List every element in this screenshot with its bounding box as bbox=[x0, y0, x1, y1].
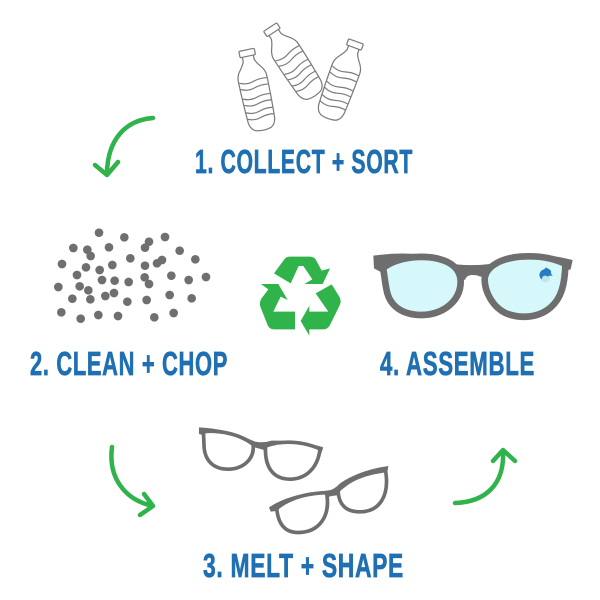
heading: step 3: 3. MELT + SHAPE bbox=[203, 547, 404, 584]
lower frame bbox=[269, 466, 388, 531]
lens logo bbox=[539, 267, 553, 282]
left lens bbox=[387, 260, 457, 312]
heading: step 2: 2. CLEAN + CHOP bbox=[30, 345, 228, 382]
heading: step 1: 1. COLLECT + SORT bbox=[195, 143, 413, 180]
illustration: three plastic bottles bbox=[232, 19, 370, 133]
icon: recycling symbol bbox=[260, 257, 341, 336]
arrow: step 3 to step 4 bbox=[455, 450, 515, 503]
illustration: chopped plastic flakes bbox=[54, 228, 210, 323]
upper frame bbox=[199, 427, 323, 477]
illustration: finished glasses with blue lenses bbox=[373, 254, 573, 313]
right lens bbox=[488, 260, 562, 313]
frame top bar and bridge bbox=[373, 254, 573, 280]
illustration: two empty glasses frames bbox=[199, 427, 388, 531]
arrow: step 2 to step 3 bbox=[111, 447, 153, 515]
arrow: step 1 to step 2 bbox=[95, 118, 153, 175]
